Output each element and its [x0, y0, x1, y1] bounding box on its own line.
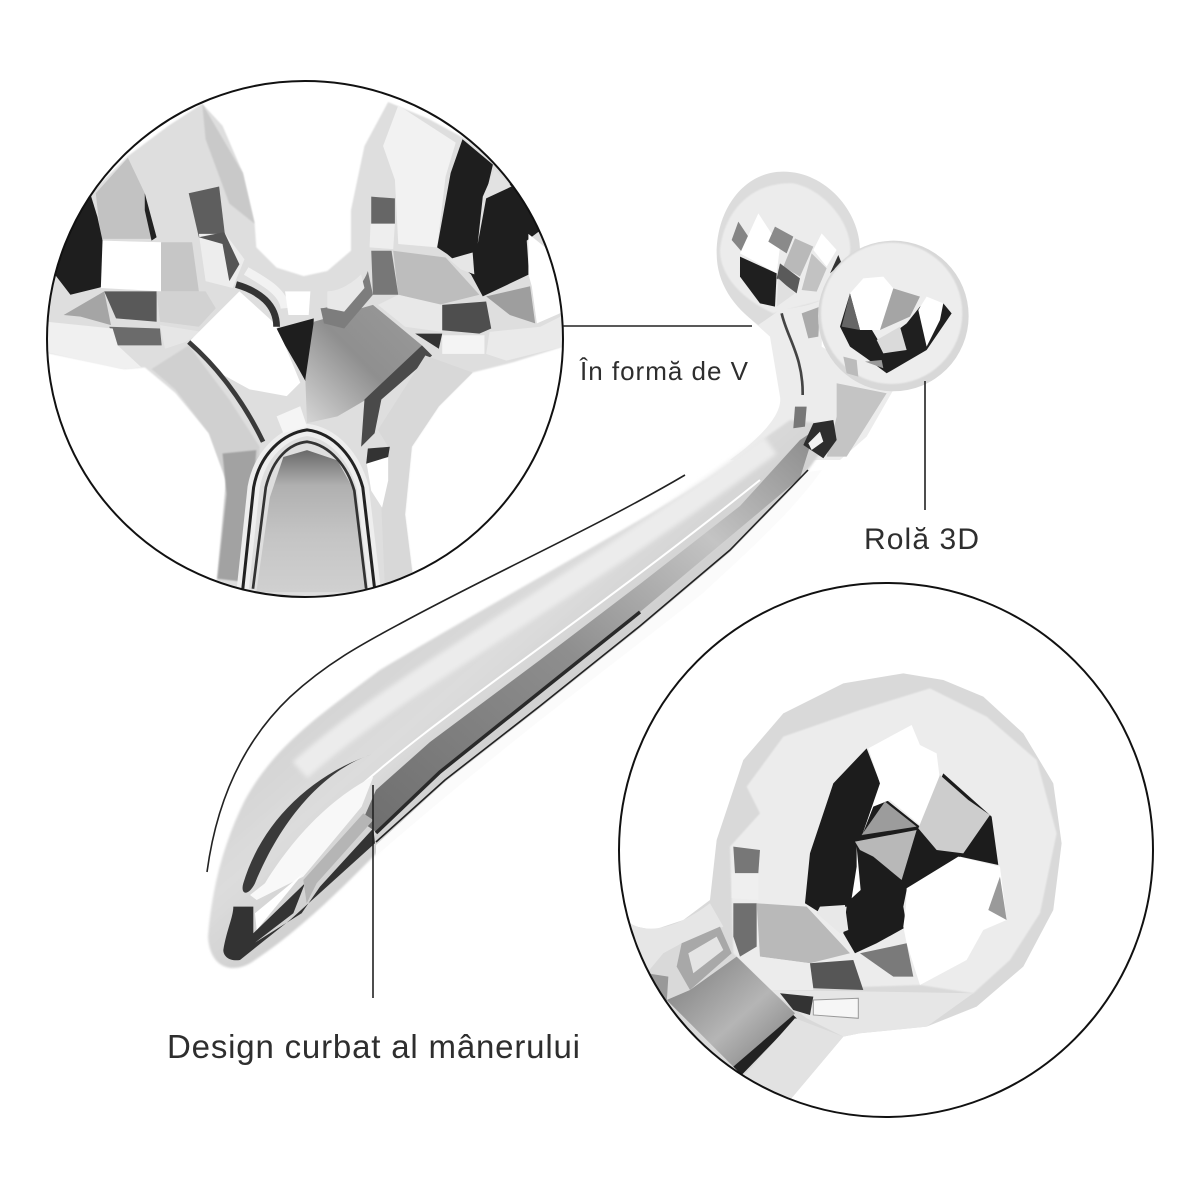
panel: V-shape close-up circle [43, 81, 567, 602]
callout line: V shape [563, 325, 752, 327]
label: V shape: În formă de V [579, 356, 749, 386]
roller ball close-up [620, 673, 1062, 1100]
label: 3D roller: Rolă 3D [864, 523, 979, 556]
product: curved roller handle [208, 297, 893, 968]
handle tip details [223, 754, 375, 960]
icon: front roller ball [818, 241, 969, 391]
icon: back roller ball [717, 172, 860, 325]
callout line: curved handle [372, 785, 374, 998]
decorative arc beside handle [207, 475, 685, 872]
callout line: 3D roller [924, 381, 926, 510]
neck of the roller head [730, 297, 893, 460]
V-shaped head close-up [43, 102, 567, 602]
panel: 3D roller close-up circle [619, 583, 1153, 1117]
label: curved handle design: Design curbat al mânerului [167, 1028, 580, 1065]
dark reflection at neck [793, 407, 837, 458]
